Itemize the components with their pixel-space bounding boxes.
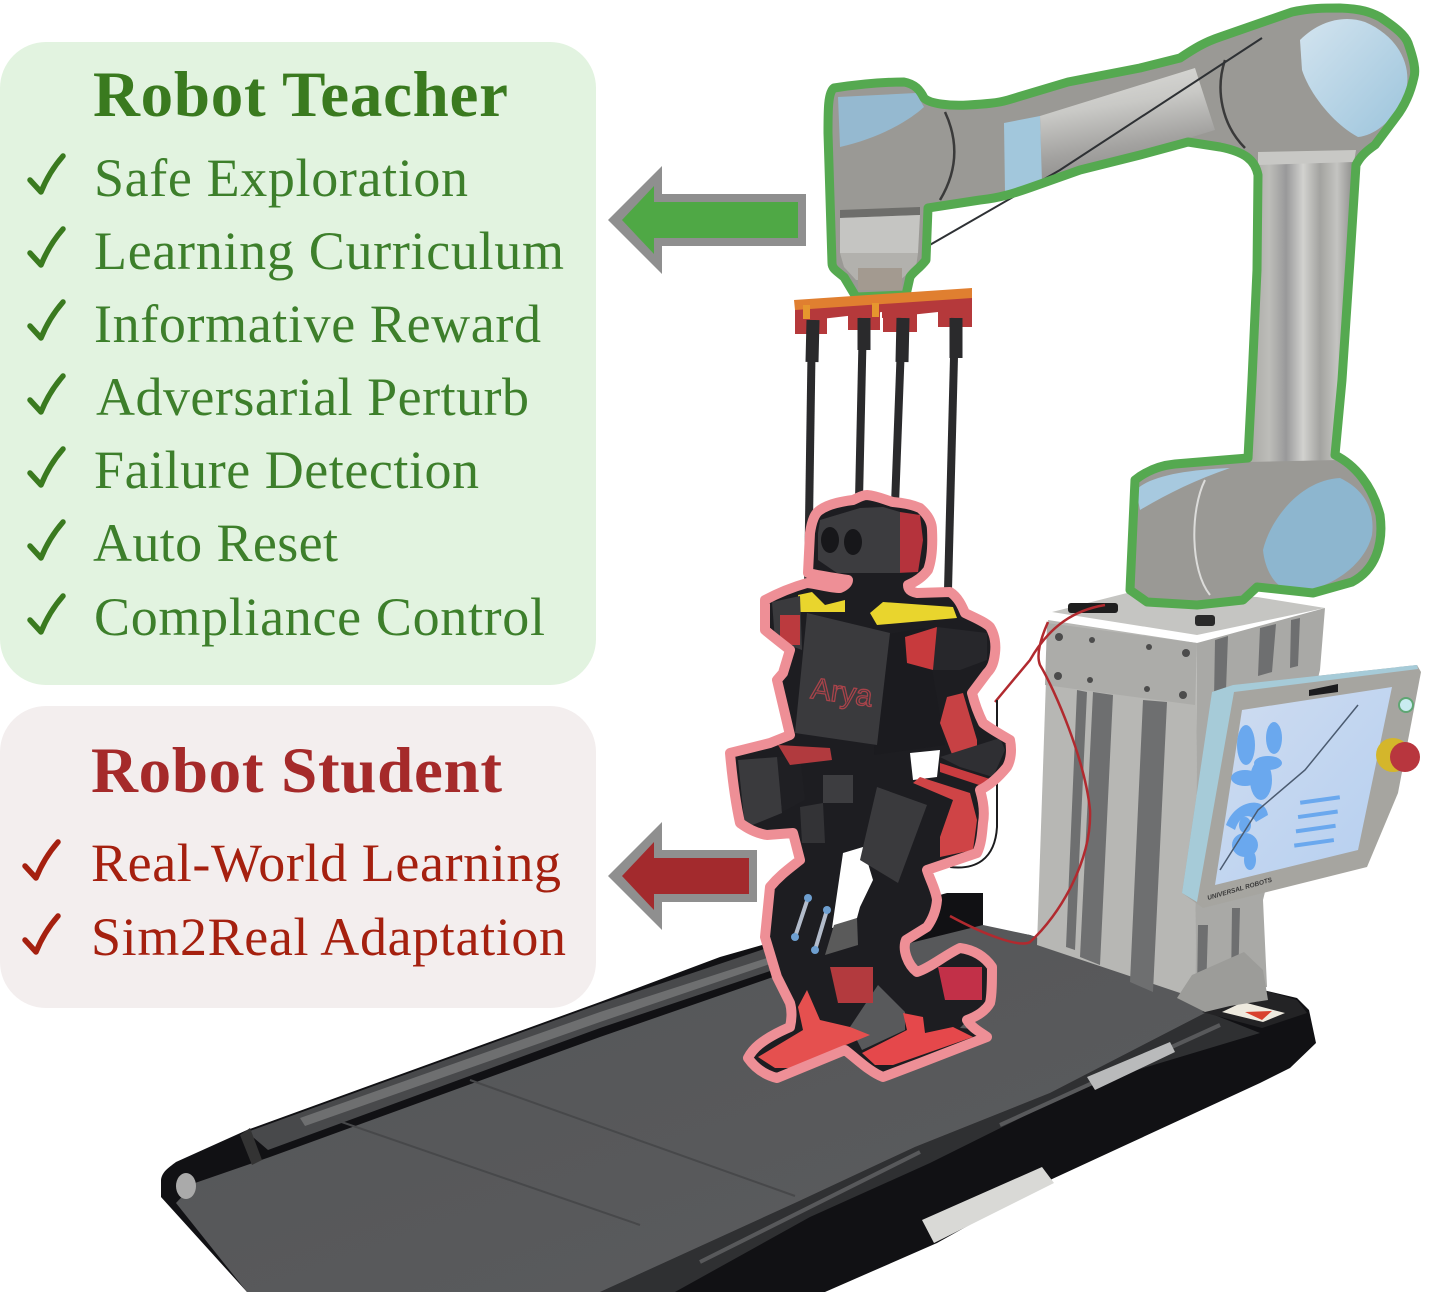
column ribs xyxy=(1066,618,1300,996)
monitor bezel xyxy=(1182,665,1421,908)
back rail xyxy=(247,920,860,1150)
left shoulder xyxy=(772,596,802,650)
top bolt xyxy=(1195,615,1215,626)
treadmill xyxy=(161,893,1316,1292)
right forearm xyxy=(913,777,977,857)
suspension rig xyxy=(794,288,972,590)
belt gap right of foot xyxy=(960,1003,990,1030)
upper arm blue band xyxy=(1004,116,1042,192)
front rail stripes xyxy=(700,1025,1220,1262)
right thigh block xyxy=(860,787,927,883)
column top plate xyxy=(1052,593,1325,635)
right foot xyxy=(862,1013,973,1065)
teacher item: compliance control: Compliance Control xyxy=(94,587,545,647)
left foot xyxy=(758,990,870,1068)
monitor brand plate xyxy=(1309,684,1338,696)
head side xyxy=(897,512,923,573)
red cable xyxy=(950,605,1105,943)
torso front xyxy=(795,613,890,745)
emergency stop xyxy=(1376,738,1420,772)
white handle xyxy=(922,1167,1054,1243)
treadmill frame xyxy=(161,893,1316,1292)
column right face xyxy=(1195,608,1325,998)
elbow blue cap xyxy=(838,93,924,147)
teacher item: learning curriculum: Learning Curriculum xyxy=(94,221,564,281)
pink outline xyxy=(730,495,1011,1078)
teacher item: auto reset: Auto Reset xyxy=(93,513,338,573)
wrist dark band xyxy=(840,207,920,218)
upper arm tube xyxy=(1040,68,1215,183)
monitor blue edge xyxy=(1182,665,1418,902)
suspension rods xyxy=(808,318,956,590)
teacher item: adversarial perturb: Adversarial Perturb xyxy=(96,367,529,427)
arm body silhouette xyxy=(828,8,1415,605)
belt surface xyxy=(176,925,1207,1292)
panel: robot teacher xyxy=(0,42,596,685)
shoulder joint ring xyxy=(1221,60,1245,148)
power button xyxy=(1399,698,1413,712)
student item: sim2real adaptation: Sim2Real Adaptation xyxy=(91,907,566,967)
teacher item: informative reward: Informative Reward xyxy=(94,294,541,354)
column base xyxy=(950,593,1325,1012)
right elbow serration xyxy=(940,763,993,787)
hip servo xyxy=(800,803,825,843)
arya label: Arya xyxy=(809,672,875,714)
camera lenses xyxy=(821,527,862,555)
hip bracket xyxy=(823,775,853,803)
back rail light stripe xyxy=(300,958,770,1126)
head camera xyxy=(818,507,900,573)
tool flange xyxy=(858,268,902,290)
green outline xyxy=(828,8,1415,605)
student panel background xyxy=(0,706,596,1008)
screen blue controls xyxy=(1226,722,1340,870)
cable clip xyxy=(1068,603,1118,613)
right foot servo xyxy=(938,967,982,1000)
upright tube xyxy=(1248,160,1354,462)
base bracket xyxy=(1177,952,1268,1012)
tube collar xyxy=(1258,150,1356,165)
arm cable xyxy=(928,38,1262,246)
base joint blue trim xyxy=(1136,468,1230,510)
yellow mount left xyxy=(798,592,845,612)
rail reflection xyxy=(1087,1042,1175,1090)
robot body silhouette xyxy=(730,495,1011,1078)
white gap under torso xyxy=(910,750,940,780)
monitor logo: UNIVERSAL ROBOTS xyxy=(1207,877,1274,902)
monitor xyxy=(1182,665,1421,908)
end cap with sticker xyxy=(1202,990,1307,1028)
arrow: teacher xyxy=(608,166,806,274)
heading: robot teacher: Robot Teacher xyxy=(93,59,508,131)
front rail xyxy=(600,1012,1260,1292)
shoulder cap xyxy=(1300,19,1407,137)
orange pegs xyxy=(803,303,879,319)
hanger lower red blocks xyxy=(795,293,972,334)
panel: robot student xyxy=(0,706,596,1008)
teacher item: failure detection: Failure Detection xyxy=(94,440,479,500)
teacher item: safe exploration: Safe Exploration xyxy=(94,148,468,208)
belt seen between legs xyxy=(850,985,905,1050)
plate bolts xyxy=(1054,633,1190,699)
heading: robot student: Robot Student xyxy=(91,735,502,807)
knee linkage xyxy=(791,894,831,954)
hanger orange bar xyxy=(794,288,972,310)
right elbow servo xyxy=(940,738,1005,777)
wrist lower cone xyxy=(840,253,918,280)
robot student xyxy=(730,495,1011,1078)
left foot servo xyxy=(830,967,873,1003)
screen trajectory line xyxy=(1220,705,1358,870)
yellow mount right xyxy=(870,602,957,625)
belt seam lines xyxy=(330,1080,795,1225)
wrist silver xyxy=(840,215,920,253)
arrow: student xyxy=(608,822,757,930)
teacher panel background xyxy=(0,42,596,685)
column left face xyxy=(1037,620,1197,998)
right upper arm xyxy=(940,693,977,757)
elbow joint ring xyxy=(940,112,954,200)
student item: real-world learning: Real-World Learning xyxy=(91,833,561,893)
base joint ring xyxy=(1194,480,1210,595)
rail seen between legs xyxy=(825,918,858,955)
left arm block xyxy=(738,745,832,828)
white gap between legs xyxy=(832,847,873,928)
clamp on rail xyxy=(240,1128,262,1165)
right shoulder servo xyxy=(905,627,987,670)
black cable xyxy=(950,700,997,868)
end roller xyxy=(176,1173,196,1199)
screen xyxy=(1215,687,1392,885)
column front plate xyxy=(1045,623,1197,705)
robot arm teacher xyxy=(828,8,1415,605)
torso side xyxy=(874,628,945,755)
base cap xyxy=(1263,478,1373,592)
